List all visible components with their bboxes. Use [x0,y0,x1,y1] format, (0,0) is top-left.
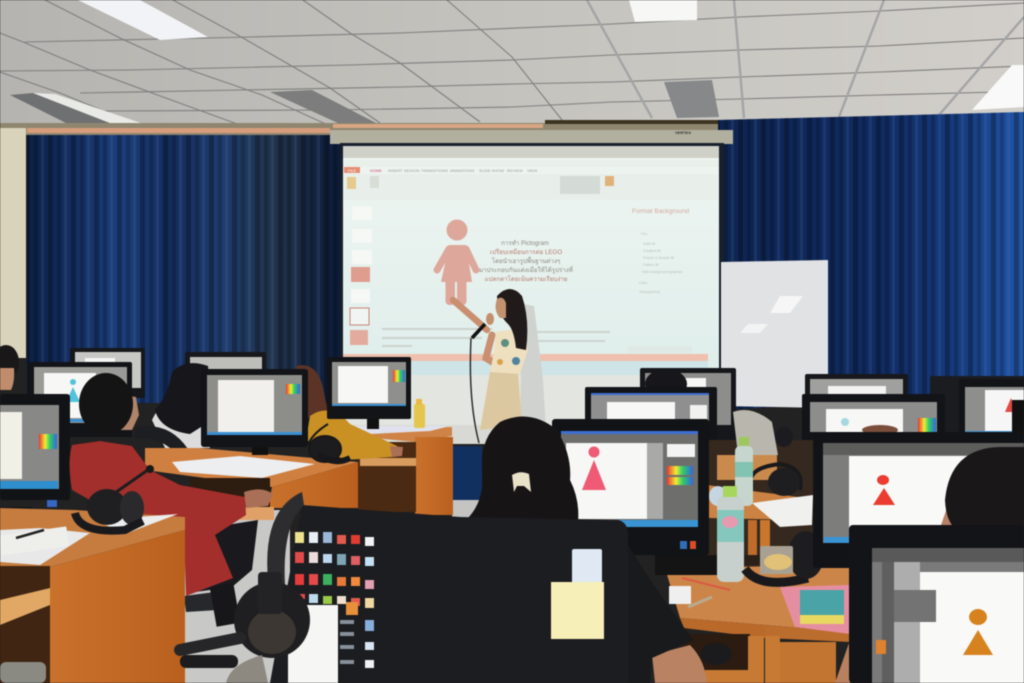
monitor: orange figure front right [835,525,1024,683]
woman with white shirt [152,363,212,448]
white window [288,605,338,683]
hair [497,289,527,350]
woman in black foreground [468,417,707,683]
monitor: far back left [70,348,145,398]
monitor: black back right [930,376,1024,436]
ribbon: INSERT [388,168,403,173]
format background panel: Solid fill [643,242,655,246]
skirt [480,372,522,430]
microphone cable [470,338,479,443]
papers on desk [172,456,315,478]
format background panel: FILL [641,232,648,236]
person far left [0,345,19,390]
monitor: back center [185,352,266,382]
format background panel: Gradient fill [643,249,661,253]
format background panel: Hide background graphics [642,270,683,274]
ribbon: DESIGN [404,168,419,173]
presenter [453,289,528,443]
headphones on front left desk [75,465,154,531]
papers, pens and booklets [669,578,850,634]
stool [0,662,46,683]
chair back [135,426,188,449]
headphones back [751,427,801,496]
back-row monitors left [0,345,453,683]
notes text [382,328,610,347]
legs and chair [195,520,258,592]
right curtain [718,112,1024,410]
microphone [472,324,485,338]
ribbon: REVIEW [507,168,523,173]
yellow sticky note [551,582,604,639]
format background panel: Transparency [639,290,661,294]
slide text [479,240,573,283]
right-center back monitors [552,368,1024,683]
middle desk [145,448,358,520]
slide text: โดยนำเอารูปพื้นฐานต่างๆ [492,256,560,265]
status bar [343,354,708,361]
monitor: pink figure center [552,419,717,575]
headphones on middle desk [308,424,350,462]
ribbon: HOME [370,168,382,173]
ribbon: SLIDE SHOW [479,168,504,173]
whiteboard [721,260,828,408]
ceiling lights [10,0,1024,125]
arm [652,645,707,683]
slide text: การทำ Pictogram [501,240,549,247]
right back desk [352,426,453,515]
wall and beam [0,120,1024,444]
slide text: มาประกอบกันแต่งเมื่อให้ได้รูปร่างที่ [479,266,573,274]
ribbon: FILE [348,168,357,173]
format background panel: Picture or texture fill [643,256,674,260]
slide text: เปรียบเหมือนการต่อ LEGO [490,248,562,256]
hand [244,489,273,508]
jacket [70,441,246,596]
lower right desks [655,555,850,683]
desk right of center [700,440,830,570]
monitor: right back desk [327,357,411,429]
shirt [620,540,693,683]
ceiling [0,0,1024,130]
woman with mustard top [296,365,403,460]
water bottle back [735,437,753,506]
headphones and snack [745,531,824,582]
blue sticker [572,549,602,584]
foreground monitor [270,505,628,683]
monitor: second row right [802,394,945,478]
front left desk [0,508,185,683]
format background panel [628,208,692,353]
format background panel: Format Background [632,208,689,215]
ribbon: VIEW [527,168,537,173]
handbag [733,410,778,455]
woman with braided hair [940,447,1024,532]
projector case [330,130,733,144]
slide thumbnails [350,206,372,345]
monitor: top right pink figure [959,379,1024,438]
monitor: red figure right [813,432,1024,568]
left curtain [27,135,343,403]
monitor: front left [0,394,70,528]
format background panel: Pattern fill [643,263,659,267]
back wall curtain gap [452,446,482,500]
yellow bottle [414,399,425,428]
man in red jacket [70,373,273,627]
hair [468,417,578,522]
projector screen [340,143,724,430]
desktop icons [295,532,374,668]
monitor: cyan figure screen [28,362,132,437]
face [118,395,139,430]
taskbar [343,361,708,375]
head [79,373,133,435]
water bottle front [717,486,744,582]
monitor: back behind presenter [640,368,736,444]
projector case: VERTEX [675,130,691,135]
slide pictogram figure [437,220,476,305]
presenter shadow [520,304,546,430]
floor [184,500,482,683]
monitor: second row center [585,387,717,477]
face [496,298,506,318]
ribbon: TRANSITIONS [421,168,448,173]
ribbon: ANIMATIONS [450,168,475,173]
arm [453,300,487,330]
foreground headphones [180,492,310,668]
ribbon [343,160,719,200]
monitor: center left [201,369,308,455]
floral blouse [490,328,528,374]
slide text: แปลกตาโดยเน้นความเรียบง่าย [485,275,568,283]
paper on desk [752,495,813,527]
monitor: upper right small [805,374,908,398]
hair clip [512,472,531,492]
shoe [226,655,268,683]
format background panel: Color [639,281,648,285]
